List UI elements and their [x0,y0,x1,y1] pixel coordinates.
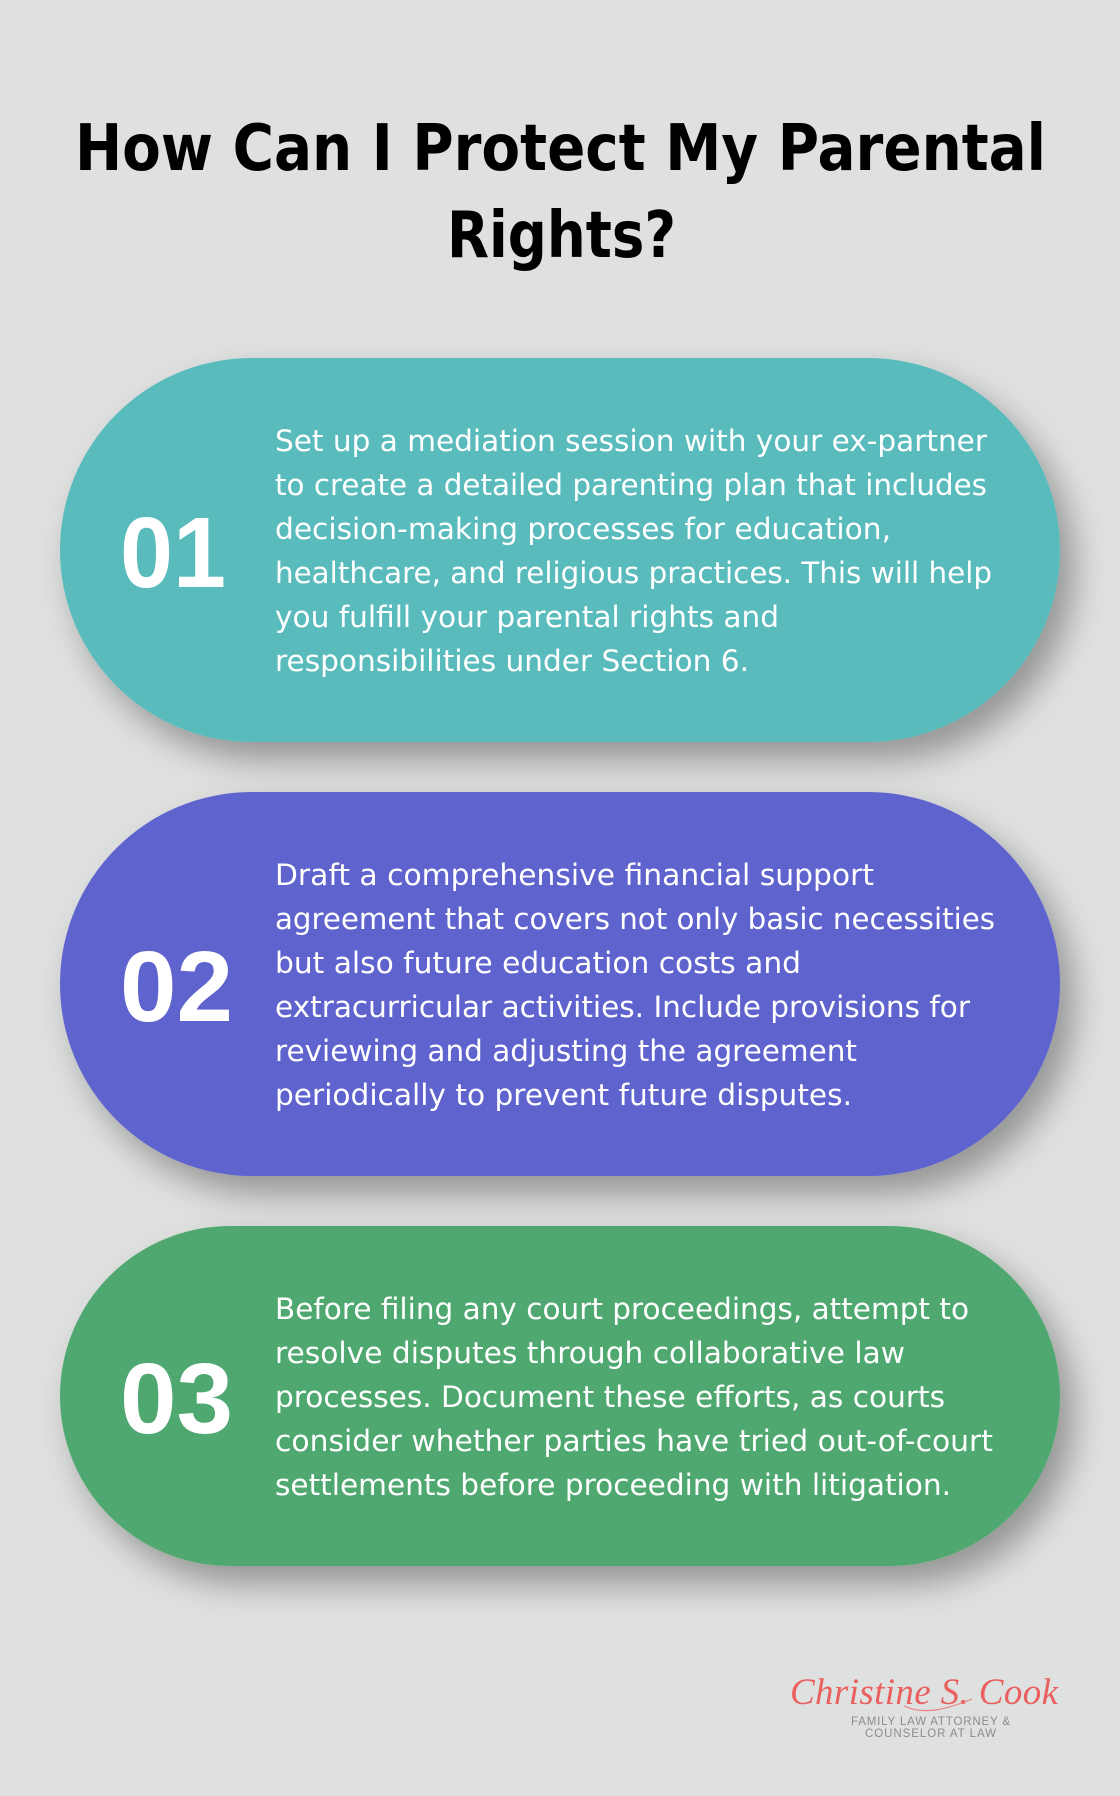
logo tagline: FAMILY LAW ATTORNEY & [851,1716,1010,1728]
panel: step 03 [60,1226,1060,1566]
pill background 03 [60,1226,1060,1566]
text block 01: Set up a mediation session with your ex-partner [275,424,988,458]
pill background 02 [60,792,1060,1176]
title [75,111,1046,273]
text block 03: processes. Document these efforts, as courts [275,1380,945,1414]
text block 01: decision-making processes for education, [275,512,891,546]
text block 02: agreement that covers not only basic necessities [275,902,995,936]
text block 01 [275,424,992,678]
text block 03: consider whether parties have tried out-of-court [275,1424,993,1458]
text block 01: responsibilities under Section 6. [275,644,749,678]
text block 03: settlements before proceeding with litigation. [275,1468,951,1502]
text block 02: periodically to prevent future disputes. [275,1078,852,1112]
text block 01: you fulfill your parental rights and [275,600,779,634]
text block 02: extracurricular activities. Include provisions for [275,990,971,1024]
text block 02: but also future education costs and [275,946,801,980]
text block 02 [275,858,995,1112]
text block 03 [275,1292,993,1502]
logo tagline [851,1716,1010,1740]
logo tagline: COUNSELOR AT LAW [865,1728,996,1740]
panel: step 01 [60,358,1060,742]
number 02: 02 [120,931,233,1043]
text block 03: Before filing any court proceedings, attempt to [275,1292,969,1326]
text block 01: healthcare, and religious practices. This will help [275,556,992,590]
logo [790,1672,1059,1740]
text block 03: resolve disputes through collaborative law [275,1336,905,1370]
text block 01: to create a detailed parenting plan that includes [275,468,987,502]
number 01: 01 [120,497,226,609]
text block 02: Draft a comprehensive financial support [275,858,874,892]
pill background 01 [60,358,1060,742]
text block 02: reviewing and adjusting the agreement [275,1034,857,1068]
number 03: 03 [120,1343,233,1455]
panel: step 02 [60,792,1060,1176]
logo script name: Christine S. Cook [790,1672,1059,1713]
title: Rights? [447,198,676,273]
